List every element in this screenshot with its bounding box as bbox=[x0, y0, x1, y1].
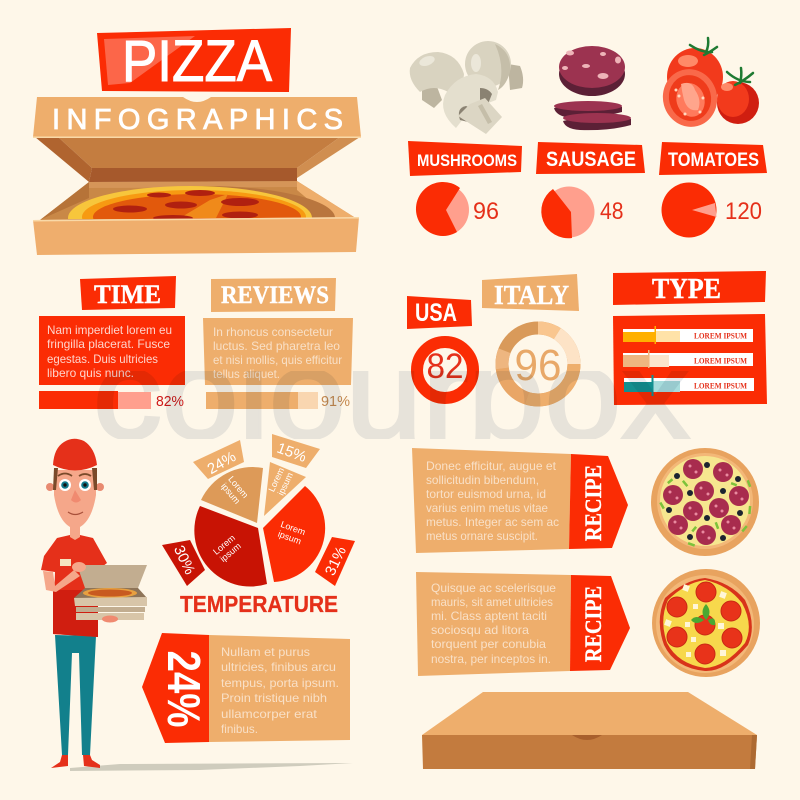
text block: reviews: et nisi mollis, quis efficitur bbox=[213, 353, 342, 367]
donut: usa 82 bbox=[417, 342, 473, 398]
panel: recipe one bbox=[412, 448, 628, 553]
text block: reviews bbox=[203, 318, 353, 385]
label: usa: USA bbox=[415, 299, 457, 327]
slice: 15%: Lorem bbox=[266, 466, 286, 493]
panel: recipe two: mi. Class aptent taciti bbox=[431, 609, 547, 623]
progress bar: 91% bbox=[206, 392, 350, 410]
illustration: delivery man bbox=[41, 439, 353, 771]
slice: 30%: ipsum bbox=[218, 541, 243, 564]
slice: 15% bbox=[264, 462, 306, 516]
tag: 24% bbox=[193, 440, 244, 479]
tag: 15% bbox=[272, 434, 320, 468]
text block: time: fringilla placerat. Fusce bbox=[47, 337, 170, 351]
bar row 2 bbox=[623, 350, 753, 368]
panel: recipe two: sociosqu ad litora bbox=[431, 623, 529, 637]
label: usa bbox=[407, 296, 472, 329]
panel: recipe one: sollicitudin bibendum, bbox=[426, 473, 539, 487]
shoes bbox=[51, 755, 68, 768]
slice: 24% bbox=[201, 467, 263, 523]
heading: type bbox=[613, 271, 766, 305]
head bbox=[54, 470, 96, 527]
bar row 1: LOREM IPSUM bbox=[694, 332, 747, 340]
text block: time: egestas. Duis ultricies bbox=[47, 352, 158, 366]
tag: 15%: 15% bbox=[275, 440, 309, 466]
heading: temperature: TEMPERATURE bbox=[180, 591, 338, 617]
callout: 24%: ullamcorper erat bbox=[221, 707, 318, 721]
icon: salami pizza bbox=[651, 448, 759, 556]
slice: 31%: Lorem bbox=[279, 519, 307, 537]
panel: recipe one: Donec efficitur, augue et bbox=[426, 459, 557, 473]
panel: recipe one: metus. Integer ac sem ac bbox=[426, 515, 559, 529]
slice: 24%: ipsum bbox=[219, 481, 242, 506]
cap bbox=[53, 439, 97, 470]
callout: 24%: finibus. bbox=[221, 722, 258, 736]
text block: reviews: tellus aliquet. bbox=[213, 367, 280, 381]
donut: italy 96: 96 bbox=[514, 341, 562, 390]
panel: recipe one: RECIPE bbox=[581, 465, 606, 541]
text block: reviews: In rhoncus consectetur bbox=[213, 325, 333, 339]
slice: 30%: Lorem bbox=[211, 533, 237, 557]
label: sausage: SAUSAGE bbox=[546, 148, 636, 171]
label: sausage bbox=[536, 142, 645, 174]
shirt bbox=[41, 535, 107, 637]
title: infographics: INFOGRAPHICS bbox=[52, 104, 343, 136]
panel: recipe one: tortor euismod urna, id bbox=[426, 487, 546, 501]
panel: recipe one: metus ornare suscipit. bbox=[426, 529, 538, 543]
text block: time: libero quis nunc. bbox=[47, 366, 134, 380]
heading: time: TIME bbox=[94, 280, 161, 309]
pie chart: mushrooms 96 bbox=[416, 182, 499, 236]
heading: reviews: REVIEWS bbox=[221, 282, 329, 309]
text block: time bbox=[39, 316, 185, 385]
heading: type: TYPE bbox=[652, 274, 721, 305]
pizza box with open lid bbox=[33, 97, 361, 255]
bar row 3: LOREM IPSUM bbox=[694, 382, 747, 390]
slice: 15%: ipsum bbox=[276, 471, 295, 497]
pizza in the box bbox=[68, 186, 335, 219]
panel: recipe two bbox=[416, 572, 630, 676]
progress bar: 82%: 82% bbox=[156, 393, 184, 410]
illustration: closed pizza box bbox=[422, 692, 757, 769]
pie chart: tomatoes 120: 120 bbox=[725, 198, 762, 225]
bar row 3 bbox=[624, 375, 754, 396]
label: mushrooms: MUSHROOMS bbox=[417, 151, 517, 170]
callout: 24%: 24% bbox=[158, 650, 210, 728]
text block: time: Nam imperdiet lorem eu bbox=[47, 323, 172, 337]
pie chart: tomatoes 120 bbox=[662, 182, 762, 238]
label: italy: ITALY bbox=[494, 280, 569, 310]
callout: 24%: tempus, porta ipsum. bbox=[221, 676, 339, 690]
panel: recipe two: Quisque ac scelerisque bbox=[431, 581, 556, 595]
panel: reviews bbox=[203, 278, 353, 410]
trousers bbox=[55, 635, 96, 755]
tag: 24%: 24% bbox=[204, 448, 239, 478]
donut: italy 96 bbox=[502, 328, 574, 400]
callout: 24% bbox=[142, 633, 350, 743]
panel: recipe one: varius enim metus vitae bbox=[426, 501, 548, 515]
bar row 2: LOREM IPSUM bbox=[694, 356, 747, 366]
panel: recipe two: torquent per conubia bbox=[431, 637, 546, 651]
tag: 30% bbox=[162, 540, 205, 586]
label: mushrooms bbox=[408, 141, 522, 176]
icon: margherita pizza bbox=[652, 569, 760, 677]
label: tomatoes: TOMATOES bbox=[668, 150, 759, 171]
tag: 31%: 31% bbox=[322, 544, 350, 578]
bar row 1 bbox=[623, 326, 753, 344]
panel: recipe two: nostra, per inceptos in. bbox=[431, 652, 551, 666]
label: tomatoes bbox=[659, 142, 767, 175]
small pizza box bbox=[74, 565, 147, 622]
panel: recipe two: RECIPE bbox=[581, 586, 606, 662]
tag: 31% bbox=[315, 537, 355, 586]
panel: recipe two: mauris, sit amet ultricies bbox=[431, 595, 553, 609]
label: italy bbox=[482, 274, 579, 311]
pie chart: sausage 48: 48 bbox=[600, 198, 624, 225]
panel: type bars bbox=[613, 314, 767, 405]
donut: usa 82: 82 bbox=[426, 347, 464, 386]
arm bbox=[43, 570, 80, 592]
tag: 30%: 30% bbox=[170, 543, 198, 577]
pie chart: mushrooms 96: 96 bbox=[473, 198, 499, 225]
progress bar: 91%: 91% bbox=[321, 393, 350, 410]
slice: 31% bbox=[263, 486, 325, 582]
slice: 24%: Lorem bbox=[226, 474, 250, 500]
icon: sausage bbox=[554, 46, 631, 130]
icon: tomatoes bbox=[656, 38, 759, 133]
icon: mushrooms bbox=[410, 36, 523, 134]
slice: 31%: ipsum bbox=[277, 529, 303, 546]
heading: time bbox=[80, 276, 176, 310]
slice: 30% bbox=[194, 506, 267, 587]
neck bbox=[70, 525, 80, 540]
pie chart: temperature bbox=[162, 434, 355, 587]
watermark: colourbox bbox=[93, 323, 690, 465]
text block: reviews: luctus. Sed pharetra leo bbox=[213, 339, 340, 353]
pie chart: sausage 48 bbox=[541, 186, 624, 238]
callout: 24%: ultricies, finibus arcu bbox=[221, 660, 336, 674]
panel: time bbox=[39, 276, 185, 410]
callout: 24%: Nullam et purus bbox=[221, 645, 310, 659]
progress bar: 82% bbox=[39, 391, 184, 410]
title: pizza: PIZZA bbox=[122, 29, 272, 94]
callout: 24%: Proin tristique nibh bbox=[221, 691, 327, 705]
